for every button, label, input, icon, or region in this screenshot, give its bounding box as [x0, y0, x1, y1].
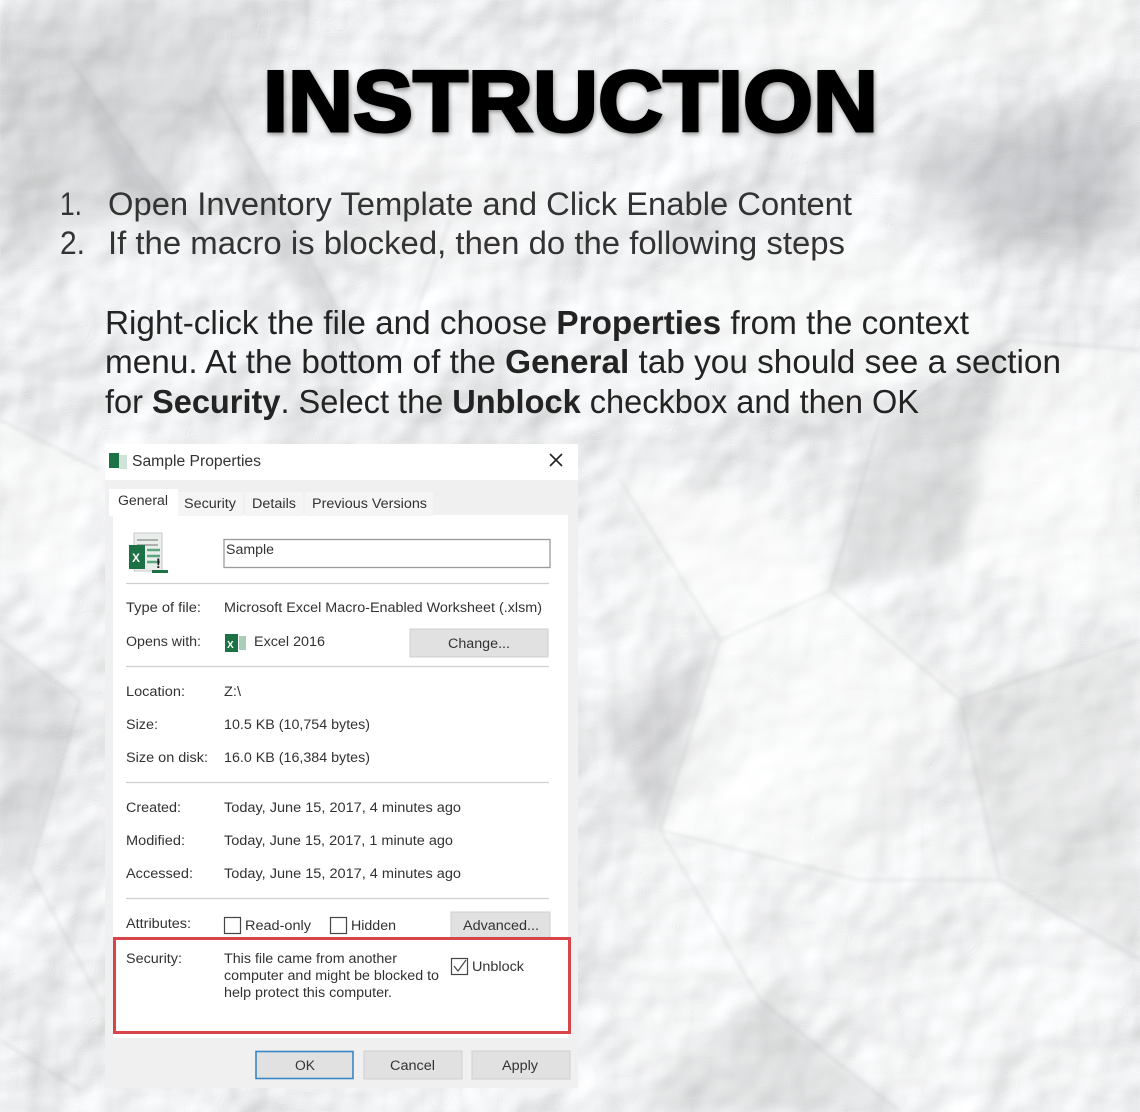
date rows: Created: — [126, 800, 181, 816]
dialog buttons — [256, 1051, 570, 1079]
icon: excel macro file: ! — [156, 555, 161, 571]
security section highlighted in red: computer and might be blocked to — [224, 968, 439, 984]
location and size rows: Size on disk: — [126, 750, 208, 766]
dialog tabs: Details — [252, 496, 296, 512]
numbered steps: 1. — [60, 186, 82, 222]
location and size rows: Size: — [126, 717, 158, 733]
file type rows: Microsoft Excel Macro-Enabled Worksheet (.xlsm) — [224, 600, 542, 616]
date rows: Today, June 15, 2017, 1 minute ago — [224, 833, 453, 849]
security section highlighted in red — [114, 938, 570, 1032]
date rows: Today, June 15, 2017, 4 minutes ago — [224, 800, 461, 816]
date rows: Modified: — [126, 833, 185, 849]
location and size rows — [126, 684, 370, 766]
date rows: Today, June 15, 2017, 4 minutes ago — [224, 866, 461, 882]
numbered steps — [60, 186, 852, 261]
dialog buttons: Apply — [502, 1058, 539, 1074]
file name field: Sample — [226, 542, 274, 558]
security section highlighted in red: This file came from another — [224, 951, 397, 967]
dialog tabs — [109, 489, 433, 516]
numbered steps: 2. — [60, 225, 85, 261]
date rows: Accessed: — [126, 866, 193, 882]
dialog tabs: General — [118, 493, 168, 509]
explanation paragraph — [105, 304, 1061, 420]
explanation paragraph: Right-click the file and choose Properties from the context — [105, 304, 969, 341]
file type rows — [126, 600, 548, 657]
file type rows: Type of file: — [126, 600, 201, 616]
dialog title bar: Sample Properties — [132, 453, 261, 470]
explanation paragraph: menu. At the bottom of the General tab you should see a section — [105, 343, 1061, 380]
dialog tabs: Security — [184, 496, 237, 512]
location and size rows: 10.5 KB (10,754 bytes) — [224, 717, 370, 733]
file type rows: Opens with: — [126, 634, 201, 650]
file type rows: X — [227, 640, 234, 651]
numbered steps: If the macro is blocked, then do the following steps — [108, 225, 845, 261]
file type rows: Change... — [448, 636, 510, 652]
location and size rows: Z:\ — [224, 684, 241, 700]
explanation paragraph: for Security. Select the Unblock checkbox and then OK — [105, 383, 919, 420]
location and size rows: 16.0 KB (16,384 bytes) — [224, 750, 370, 766]
security section highlighted in red: Unblock — [472, 959, 525, 975]
attributes row: Read-only — [245, 918, 312, 934]
file type rows: Excel 2016 — [254, 634, 325, 650]
dialog buttons: OK — [295, 1058, 316, 1074]
properties dialog screenshot — [105, 444, 578, 1088]
attributes row: Hidden — [351, 918, 396, 934]
attributes row: Advanced... — [463, 918, 539, 934]
file name field — [224, 540, 550, 568]
location and size rows: Location: — [126, 684, 185, 700]
icon: excel macro file: X — [132, 551, 140, 565]
attributes row — [126, 912, 550, 938]
security section highlighted in red: Security: — [126, 951, 182, 967]
security section highlighted in red: help protect this computer. — [224, 985, 392, 1001]
icon: excel macro file — [129, 533, 168, 573]
date rows — [126, 800, 461, 882]
dialog buttons: Cancel — [390, 1058, 435, 1074]
numbered steps: Open Inventory Template and Click Enable Content — [108, 186, 852, 222]
dialog title bar — [109, 453, 562, 470]
dialog tabs: Previous Versions — [312, 496, 427, 512]
attributes row: Attributes: — [126, 916, 191, 932]
title: INSTRUCTION — [263, 54, 878, 150]
